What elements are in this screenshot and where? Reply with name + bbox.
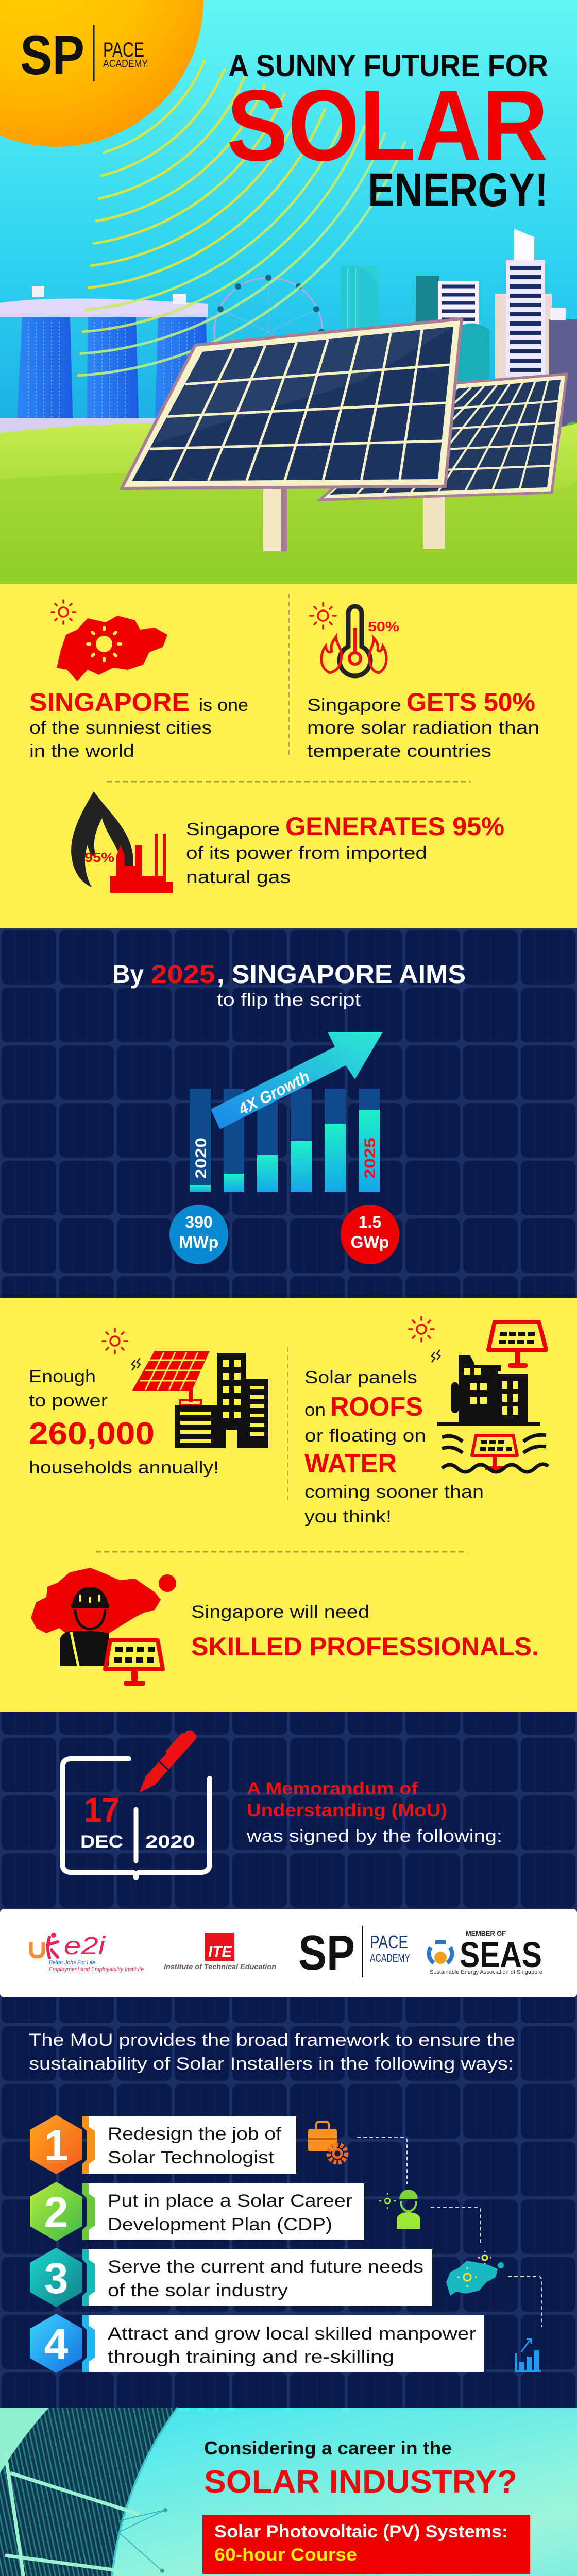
text: roofs or water (304, 1368, 484, 1527)
text: generates 95%: GENERATES 95% (285, 812, 504, 841)
logo: ITE (164, 1933, 276, 1971)
text: 260,000 households: to power (29, 1391, 108, 1411)
text: generates 95%: of its power from imported (186, 843, 427, 863)
icon: panel and buildings (103, 1329, 268, 1448)
text: 260,000 households (29, 1367, 219, 1478)
step 4: Attract and grow local skilled manpower (108, 2324, 476, 2344)
text: 260,000 households: households annually! (29, 1458, 219, 1478)
logo: e2i: Better Jobs For Life (49, 1959, 95, 1966)
logo: SEAS: Sustainable Energy Association of Singapore (430, 1969, 542, 1975)
text: sunniest cities: is one (199, 696, 248, 715)
step 3: of the solar industry (108, 2281, 288, 2300)
connectors: dashed lines between step icons (357, 2138, 541, 2327)
step 3: Serve the current and future needs (108, 2257, 423, 2277)
course box: 60-hour (202, 2515, 530, 2574)
callout: 390 MWp: 390 (185, 1213, 213, 1231)
icon: gas flame and factory: 95% (84, 850, 114, 865)
logo: SP PACE Academy (20, 24, 148, 86)
text: MoU signed: A Memorandum of (247, 1779, 418, 1799)
text: MoU signed (246, 1779, 502, 1846)
heading: By 2025: By (112, 960, 144, 989)
text: roofs or water: coming sooner than (304, 1482, 484, 1502)
step 2 (30, 2182, 364, 2241)
text: sunniest cities: in the world (29, 741, 134, 761)
icon: book with date and pen: 17 (84, 1790, 120, 1829)
icon: briefcase and gear (308, 2122, 346, 2162)
heading: solar industry (204, 2437, 517, 2500)
skyline: buildings (341, 229, 577, 438)
skyline: Marina Bay Sands (0, 286, 288, 433)
arrow: 4X growth (211, 1032, 383, 1129)
text: skilled professionals: SKILLED PROFESSIONALS. (191, 1632, 539, 1661)
text: skilled professionals (191, 1602, 539, 1661)
text: roofs or water: WATER (304, 1449, 397, 1479)
icon: thermometer with flames (310, 603, 399, 676)
text: roofs or water: on (304, 1400, 326, 1420)
title: SOLAR (227, 69, 548, 182)
callout: 1.5 GWp: 1.5 (359, 1213, 381, 1231)
logo: SEAS: MEMBER OF (466, 1930, 506, 1937)
solar panel: front (122, 319, 462, 551)
text: MoU signed: was signed by the following: (246, 1826, 502, 1846)
logo: SP PACE Academy (298, 1925, 410, 1980)
title (227, 48, 548, 216)
icon: sun (0, 0, 203, 147)
icon: thermometer with flames: 50% (368, 619, 399, 634)
text: framework intro: The MoU provides the broad framework to ensure the (29, 2030, 515, 2050)
text: gets 50%: Singapore (307, 696, 401, 715)
logo: e2i (31, 1933, 144, 1973)
text: gets 50%: GETS 50% (406, 688, 535, 717)
logo strip (0, 1909, 577, 1997)
curved solar panel decoration (0, 2408, 278, 2576)
step 1: Solar Technologist (108, 2148, 275, 2167)
step 4 (30, 2314, 484, 2373)
icon: Singapore map with sun (52, 600, 167, 681)
heading: solar industry: Considering a career in the (204, 2437, 452, 2459)
heading: solar industry: SOLAR INDUSTRY? (204, 2464, 517, 2500)
icon: rooftop and floating panels (409, 1317, 548, 1472)
panel: 2025 target (0, 928, 577, 1298)
icon: book with date and pen (62, 1727, 210, 1878)
course box: 60-hour: Solar Photovoltaic (PV) Systems: (214, 2522, 508, 2541)
icon: book with date and pen: DEC (80, 1832, 123, 1852)
text: roofs or water: ROOFS (330, 1392, 423, 1422)
icon: gas flame and factory (71, 791, 173, 893)
panel: impact (yellow) (0, 1298, 577, 1712)
callout: 390 MWp: MWp (179, 1233, 218, 1251)
skyline: ferris wheel (214, 275, 325, 386)
callout: 1.5 GWp (341, 1205, 399, 1264)
step 2: Put in place a Solar Career (108, 2191, 352, 2211)
text: generates 95%: Singapore (186, 820, 280, 839)
logo: SP PACE Academy: PACE (103, 39, 144, 61)
step 4: 4 (44, 2320, 69, 2368)
text: gets 50% (307, 688, 539, 761)
logo: SP PACE Academy: SP (298, 1925, 355, 1980)
bar chart: 2025 (362, 1138, 379, 1179)
text: sunniest cities (29, 688, 248, 761)
step 2: 2 (44, 2188, 68, 2236)
logo: ITE: Institute of Technical Education (164, 1962, 276, 1971)
grass (0, 423, 577, 584)
icon: teal Singapore map (446, 2251, 504, 2296)
logo: SEAS: SEAS (460, 1935, 542, 1975)
text: generates 95%: natural gas (186, 868, 291, 887)
panel: Singapore facts (yellow) (0, 584, 577, 928)
callout: 1.5 GWp: GWp (351, 1233, 389, 1251)
solar panel: back (320, 374, 567, 549)
text: framework intro: sustainability of Solar Installers in the following ways: (29, 2054, 514, 2074)
logo: SP PACE Academy: PACE (370, 1931, 408, 1953)
step 3: 3 (44, 2254, 68, 2302)
logo: SP PACE Academy: SP (20, 24, 84, 86)
text: 260,000 households: 260,000 (29, 1416, 155, 1451)
logo: SEAS (429, 1930, 542, 1975)
heading: By 2025 (112, 960, 466, 1010)
step 1 (30, 2115, 296, 2174)
text: sunniest cities: of the sunniest cities (29, 718, 212, 738)
step 3 (30, 2248, 432, 2307)
step 4: through training and re-skilling (108, 2347, 394, 2367)
course box: 60-hour: 60-hour Course (214, 2545, 357, 2565)
icon: green worker (379, 2190, 420, 2229)
icon: worker over Singapore map (31, 1568, 176, 1686)
text: roofs or water: or floating on (304, 1426, 426, 1446)
text: sunniest cities: SINGAPORE (29, 688, 190, 717)
text: skilled professionals: Singapore will need (191, 1602, 369, 1622)
logo: e2i: e2i (64, 1933, 106, 1960)
heading: By 2025: , SINGAPORE AIMS (217, 960, 466, 989)
heading: By 2025: to flip the script (217, 990, 361, 1010)
sun rays (77, 60, 405, 376)
panel: MoU and framework (0, 1712, 577, 2408)
logo: ITE: ITE (208, 1943, 232, 1960)
logo: SP PACE Academy: ACADEMY (370, 1952, 410, 1964)
hero section (0, 0, 577, 584)
arrow: 4X growth: 4X Growth (235, 1067, 313, 1119)
step 1: 1 (44, 2121, 68, 2170)
text: gets 50%: temperate countries (307, 741, 491, 761)
text: generates 95% (186, 812, 504, 887)
bar chart (190, 1089, 380, 1192)
logo: SP PACE Academy: ACADEMY (103, 58, 148, 70)
step 2: Development Plan (CDP) (108, 2215, 332, 2234)
bar chart: 2020 (193, 1138, 210, 1179)
text: roofs or water: you think! (304, 1507, 392, 1527)
text: framework intro (29, 2030, 515, 2074)
heading: By 2025: 2025 (151, 960, 215, 989)
callout: 390 MWp (169, 1205, 228, 1264)
panel: career call to action (0, 2408, 577, 2576)
text: MoU signed: Understanding (MoU) (247, 1801, 447, 1820)
icon: growth chart (515, 2339, 541, 2372)
title: A SUNNY FUTURE FOR (228, 48, 548, 83)
text: gets 50%: more solar radiation than (307, 718, 539, 738)
icon: book with date and pen: 2020 (145, 1832, 195, 1852)
step 1: Redesign the job of (108, 2124, 282, 2144)
logo: e2i: Employment and Employability Institute (49, 1965, 144, 1973)
text: roofs or water: Solar panels (304, 1368, 417, 1387)
text: 260,000 households: Enough (29, 1367, 96, 1386)
